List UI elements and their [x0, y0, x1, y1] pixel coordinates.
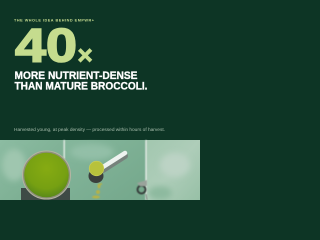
- headline: THAN MATURE BROCCOLI.: [14, 80, 148, 92]
- scoop with powder: [88, 153, 125, 198]
- tile middle: [64, 140, 146, 200]
- glass of green drink: [22, 151, 70, 199]
- eyebrow label: THE WHOLE IDEA BEHIND EMPWR+: [14, 18, 95, 22]
- big stat: 40x: 40: [15, 18, 77, 72]
- background panel: [0, 0, 200, 140]
- photo: tiles with glass and scoop: [0, 140, 200, 200]
- scoop shadow: [88, 169, 104, 183]
- infographic: [0, 18, 200, 200]
- multiplier sign: ×: [78, 40, 93, 70]
- tile right: [146, 140, 200, 200]
- glass shadow: [21, 188, 70, 200]
- metal ring clasp: [137, 180, 147, 200]
- tile grout lines: [63, 140, 147, 200]
- spilled powder: [92, 183, 102, 198]
- headline: MORE NUTRIENT-DENSE: [14, 70, 138, 82]
- headline: [14, 70, 148, 92]
- scoop handle: [103, 153, 125, 170]
- supporting text: Harvested young, at peak density — processed within hours of harvest.: [14, 127, 165, 133]
- scoop powder: [89, 161, 104, 176]
- tile left: [0, 140, 64, 200]
- big stat: 40x: [15, 18, 93, 72]
